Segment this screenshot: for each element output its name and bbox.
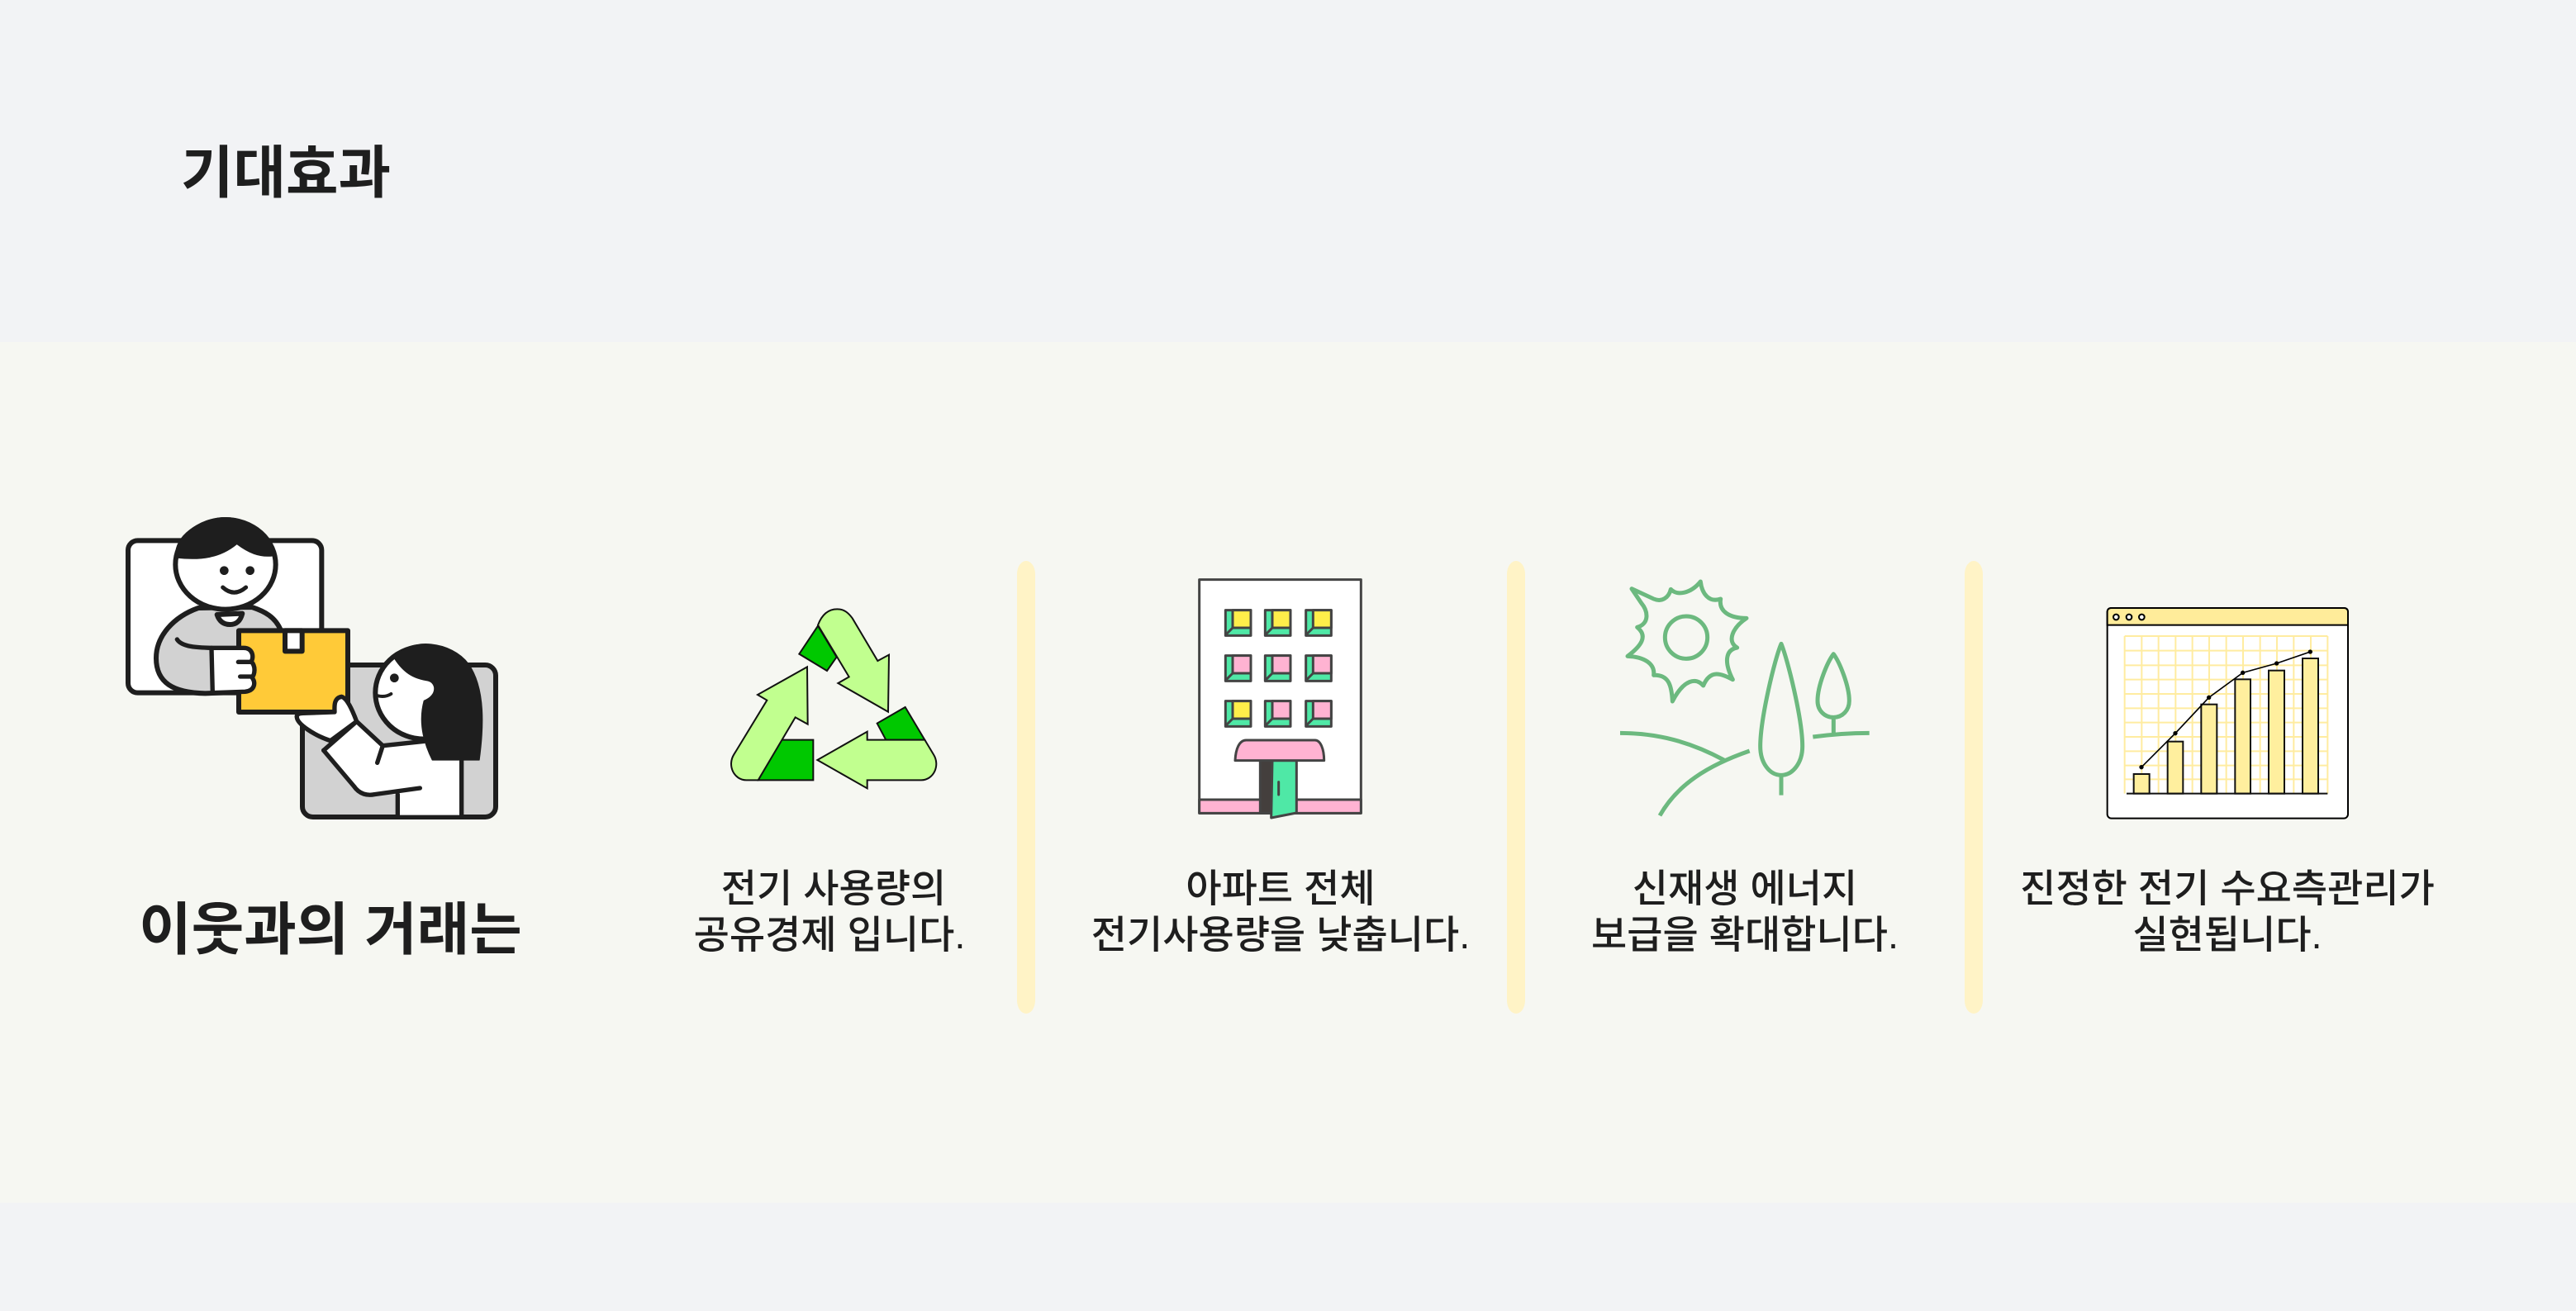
icon: apartment building [1200, 580, 1361, 818]
divider [1965, 561, 1983, 1014]
text: demand management: 진정한 전기 수요측관리가 [2020, 867, 2435, 910]
text: shared economy: 공유경제 입니다. [694, 913, 965, 957]
text: renewable energy: 신재생 에너지 [1633, 867, 1857, 910]
icon: recycling arrows [731, 609, 936, 788]
text: renewable energy [1591, 867, 1899, 957]
text: lower apartment usage [1091, 867, 1470, 957]
divider [1017, 561, 1035, 1014]
divider [1507, 561, 1525, 1014]
text: renewable energy: 보급을 확대합니다. [1591, 913, 1899, 957]
bar chart [2134, 658, 2318, 794]
title: 기대효과 [181, 141, 391, 205]
heading: trade with neighbours: 이웃과의 거래는 [139, 898, 522, 962]
text: shared economy [694, 867, 965, 957]
text: lower apartment usage: 아파트 전체 [1186, 867, 1376, 910]
icon: browser window with bar chart [2108, 608, 2348, 819]
panel: expected effects [0, 342, 2576, 1203]
text: lower apartment usage: 전기사용량을 낮춥니다. [1091, 913, 1470, 957]
text: demand management [2020, 867, 2435, 957]
text: demand management: 실현됩니다. [2132, 913, 2322, 957]
icon: sun and trees [1620, 582, 1870, 815]
icon: two neighbours exchanging a parcel [128, 518, 496, 817]
text: shared economy: 전기 사용량의 [721, 867, 946, 910]
